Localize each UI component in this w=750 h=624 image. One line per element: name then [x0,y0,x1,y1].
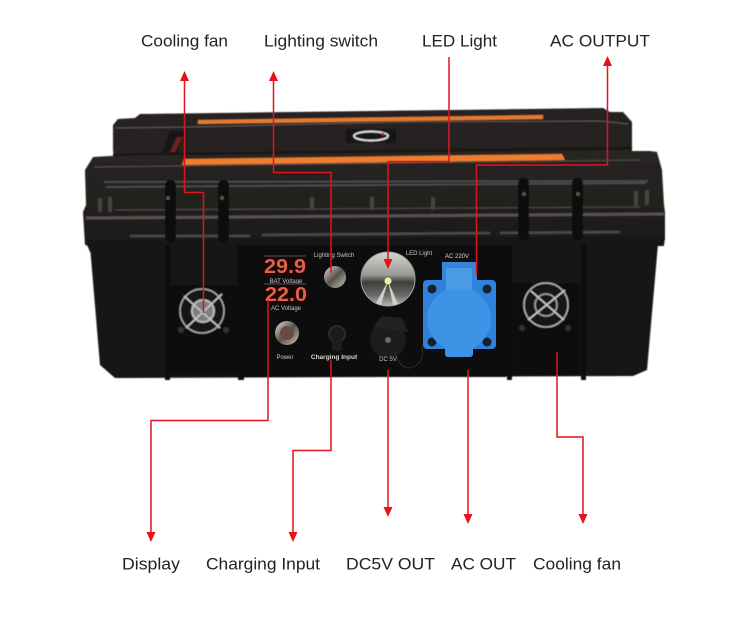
lid ribs [104,181,648,187]
front orange stripe [182,154,565,165]
charging input: Charging Input [311,354,358,361]
arrow: cooling fan top [180,71,204,313]
arrow: cooling fan bottom [557,352,588,524]
power station case [83,108,665,380]
label: Cooling fan: Cooling fan [141,32,228,50]
DC 5V port [370,316,422,368]
label: AC OUTPUT: AC OUTPUT [550,32,650,50]
right cooling fan [512,247,580,375]
left cooling fan [170,247,238,375]
arrow: DC5V out [384,370,392,517]
arrow: charging input [288,360,331,542]
body ribs [165,245,586,380]
arrow: LED light [384,57,449,269]
case body [90,244,658,378]
display: AC voltage: 22.0 [265,284,307,306]
LED light: LED Light [406,251,433,257]
display: BAT voltage [263,256,307,285]
power button [275,321,299,361]
arrow: lighting switch [269,71,331,273]
hinge pegs [98,190,649,212]
display: AC voltage: AC Voltage [271,306,302,312]
label: DC5V OUT: DC5V OUT [346,554,435,574]
display: BAT voltage: 29.9 [264,256,306,278]
LED light [361,251,433,306]
lighting switch [314,253,354,288]
AC 220V socket [423,254,496,357]
label: Lighting switch: Lighting switch [264,32,378,50]
DC 5V port: DC 5V [379,357,397,363]
back orange stripe [198,115,543,124]
control panel [244,246,507,377]
power button: Power [276,355,294,361]
AC 220V socket: AC 220V [445,254,469,260]
label: Charging Input: Charging Input [206,554,320,574]
lighting switch: Lighting Switch [314,253,354,259]
label: LED Light: LED Light [422,32,497,50]
logo plate [346,129,396,143]
label: AC OUT: AC OUT [451,554,516,574]
latches [165,178,583,242]
charging input [311,326,358,361]
display: BAT voltage: BAT Voltage [270,279,303,285]
arrow: display [146,300,268,542]
label: Display: Display [122,554,181,574]
label: Cooling fan bottom: Cooling fan [533,554,621,574]
front lid [83,151,665,250]
side label [161,131,186,155]
display: AC voltage [264,284,308,312]
back lid [113,108,632,158]
arrow: AC out [464,370,472,524]
arrow: AC output [476,56,612,275]
